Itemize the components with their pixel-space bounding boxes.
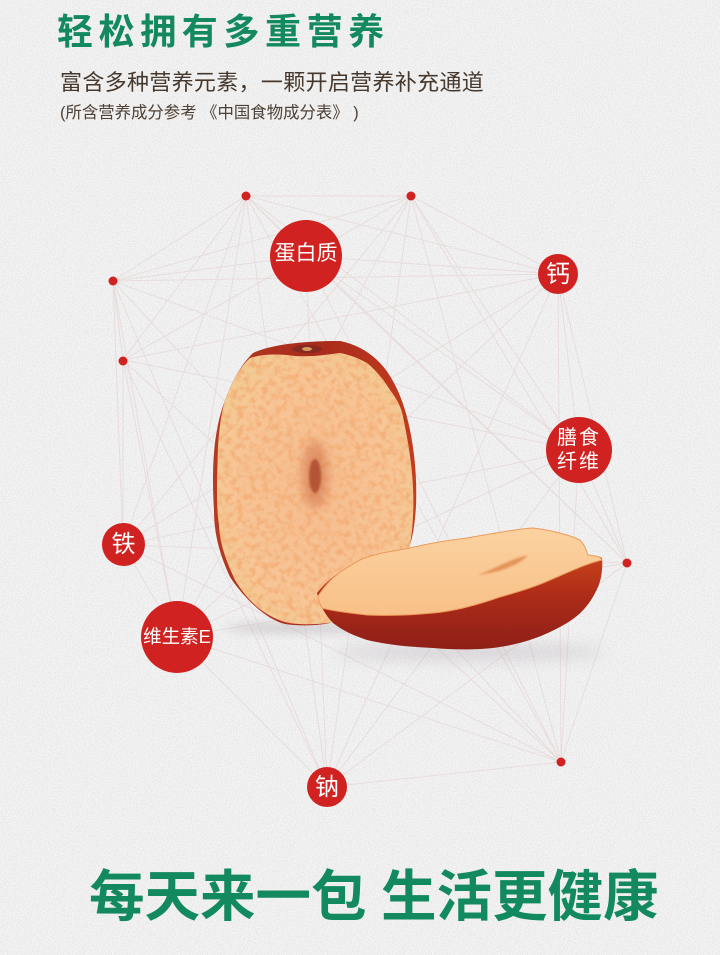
nutrient: sodium [307,767,347,807]
nutrient: vitamin E [141,601,213,673]
nutrient: calcium: 钙 [546,261,570,288]
nutrient: iron [102,523,145,566]
nutrient: dietary fibre: 纤维 [557,451,601,473]
source note: (所含营养成分参考 《中国食物成分表》 ) [60,104,359,122]
ground shadow [225,624,605,658]
nutrient: calcium [538,254,578,294]
subtitle: 富含多种营养元素，一颗开启营养补充通道 [60,70,484,95]
nutrient: dietary fibre [546,417,612,483]
nutrient: protein [270,220,342,292]
nutrient: sodium: 钠 [315,774,339,801]
closing slogan, left part: 每天来一包 [89,866,367,928]
nutrient: dietary fibre: 膳食 [557,427,601,449]
lying jujube half [317,528,602,649]
nutrient: iron: 铁 [112,531,136,558]
nutrient: vitamin E: 维生素E [143,626,211,647]
upright jujube half [213,341,416,625]
title: 轻松拥有多重营养 [57,11,390,52]
closing slogan, right part: 生活更健康 [381,866,659,928]
nutrient: protein: 蛋白质 [274,242,338,265]
